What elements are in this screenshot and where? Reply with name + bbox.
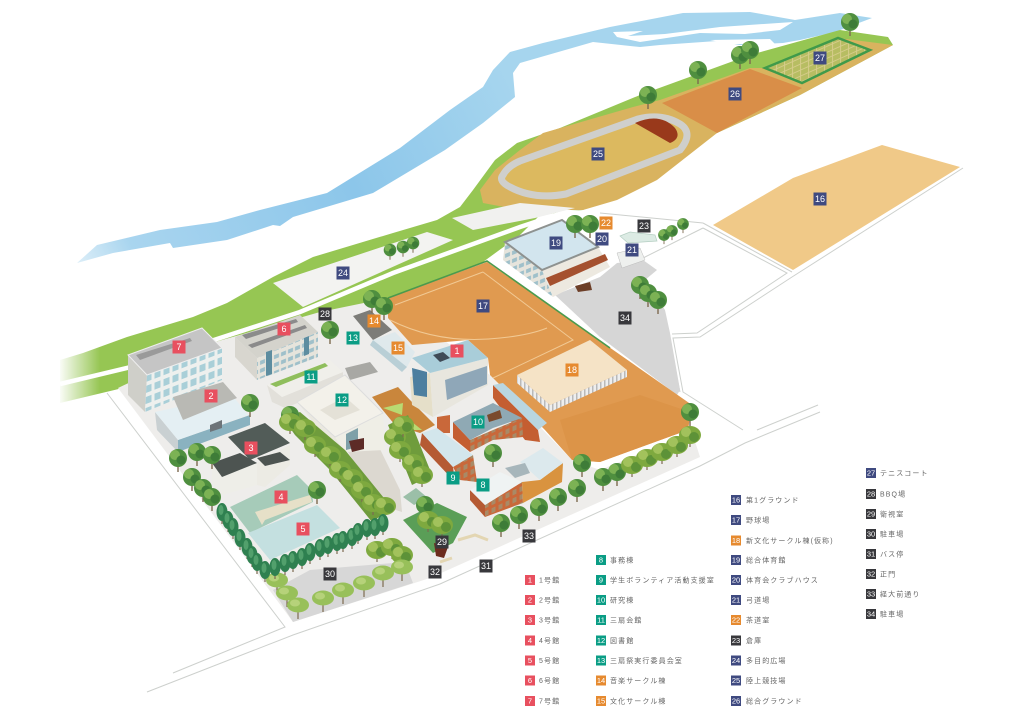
legend column 3: grounds and clubs 16-26: 22 (732, 616, 740, 625)
legend column 3: grounds and clubs 16-26: 18 (732, 536, 740, 545)
legend column 3: grounds and clubs 16-26: 26 (732, 697, 740, 706)
warehouse 23 (620, 232, 657, 243)
marker 27 (814, 52, 826, 64)
legend column 2: facilities 8-15: 11 (597, 616, 605, 625)
marker 18 (566, 364, 578, 376)
front steps (440, 535, 488, 562)
marker 28 (318, 308, 332, 320)
legend column 3: grounds and clubs 16-26: 25 (732, 676, 740, 685)
legend column 1: numbered halls: 5号館 (539, 656, 560, 665)
marker 6 (278, 322, 290, 336)
marker 33: 33 (524, 531, 534, 541)
legend column 2: facilities 8-15: 音楽サークル棟 (610, 676, 666, 685)
legend column 4: outdoor and services 27-34 (866, 468, 929, 619)
white apron near gym (452, 203, 575, 230)
marker 14 (368, 314, 380, 328)
marker 2 (204, 390, 218, 402)
gravel plaza (345, 445, 402, 512)
legend column 2: facilities 8-15: 10 (597, 596, 605, 605)
marker 17 (476, 300, 490, 312)
garden walkway (372, 387, 435, 433)
legend column 3: grounds and clubs 16-26: 陸上競技場 (746, 676, 786, 685)
marker 31: 31 (481, 561, 491, 571)
marker 4: 4 (278, 492, 284, 502)
marker 20 (596, 232, 608, 246)
marker 7: 7 (176, 342, 182, 352)
legend column 3: grounds and clubs 16-26: 体育会クラブハウス (746, 576, 819, 585)
marker 19: 19 (551, 238, 561, 248)
marker 34 (618, 312, 632, 324)
new culture circle building 18 (517, 340, 627, 412)
legend column 2: facilities 8-15: 文化サークル棟 (610, 697, 666, 706)
marker 5 (296, 522, 310, 536)
marker 9: 9 (450, 473, 456, 483)
marker 24: 24 (338, 268, 348, 278)
marker 28: 28 (320, 309, 330, 319)
building 6 (235, 315, 318, 380)
parking lot 30 (273, 562, 413, 622)
marker 1: 1 (454, 346, 460, 356)
legend column 4: outdoor and services 27-34: 経大前通り (880, 590, 920, 599)
legend column 4: outdoor and services 27-34: 正門 (880, 571, 896, 579)
marker 26: 26 (730, 89, 740, 99)
parking lot 34 (555, 260, 680, 395)
legend column 4: outdoor and services 27-34: 29 (867, 510, 875, 519)
tree belt underlay (283, 412, 432, 522)
building 10 (453, 403, 523, 452)
legend column 3: grounds and clubs 16-26: 19 (732, 556, 740, 565)
building 3 (212, 423, 290, 495)
marker 24 (336, 266, 350, 280)
marker 10: 10 (473, 417, 483, 427)
marker 11 (304, 370, 318, 384)
legend column 3: grounds and clubs 16-26: 総合グラウンド (746, 697, 803, 706)
front lawn (403, 503, 467, 553)
marker 9 (446, 472, 460, 484)
marker 3 (244, 442, 258, 454)
long brick building (493, 383, 547, 442)
legend column 1: numbered halls: 5 (528, 656, 532, 665)
building 15 (370, 332, 415, 372)
legend column 3: grounds and clubs 16-26: 17 (732, 516, 740, 525)
legend column 3: grounds and clubs 16-26: 23 (732, 636, 740, 645)
legend column 2: facilities 8-15: 研究棟 (610, 596, 634, 605)
marker 8: 8 (480, 480, 486, 490)
legend column 2: facilities 8-15: 8 (599, 556, 603, 565)
legend column 1: numbered halls: 6 (528, 676, 532, 685)
legend column 4: outdoor and services 27-34: テニスコート (880, 470, 929, 478)
legend column 2: facilities 8-15: 9 (599, 576, 603, 585)
marker 21 (626, 244, 638, 256)
marker 13: 13 (348, 333, 358, 343)
legend column 4: outdoor and services 27-34: 33 (867, 590, 875, 599)
marker 15: 15 (393, 343, 403, 353)
campus pavement (118, 298, 700, 622)
marker 18: 18 (567, 365, 577, 375)
legend column 4: outdoor and services 27-34: 30 (867, 530, 875, 539)
legend column 1: numbered halls: 1号館 (539, 576, 560, 585)
legend column 1: numbered halls: 2 (528, 596, 532, 605)
map number markers (172, 52, 826, 580)
legend column 3: grounds and clubs 16-26: 24 (732, 656, 740, 665)
trees: parking lot row (266, 560, 413, 619)
legend column 2: facilities 8-15: 事務棟 (610, 556, 634, 565)
marker 29 (436, 536, 448, 548)
marker 2: 2 (208, 391, 214, 401)
building 14 (353, 310, 392, 340)
marker 21: 21 (627, 245, 637, 255)
legend column 1: numbered halls: 6号館 (539, 676, 560, 685)
legend column 2: facilities 8-15: 14 (597, 676, 605, 685)
marker 22: 22 (601, 218, 611, 228)
legend column 4: outdoor and services 27-34: 27 (867, 469, 875, 478)
marker 30 (324, 568, 336, 580)
legend column 2: facilities 8-15: 12 (597, 636, 605, 645)
building 7 (128, 328, 222, 412)
legend column 2: facilities 8-15 (596, 555, 715, 706)
general ground 26 (662, 69, 802, 133)
marker 29: 29 (437, 537, 447, 547)
marker 16: 16 (815, 194, 825, 204)
legend column 1: numbered halls: 2号館 (539, 596, 560, 605)
riverside green embankment (60, 30, 893, 403)
building 8 (470, 448, 563, 517)
marker 32 (428, 566, 442, 578)
marker 11: 11 (306, 372, 316, 382)
athletic grounds tan base (480, 38, 893, 210)
marker 12 (336, 394, 348, 406)
legend column 2: facilities 8-15: 13 (597, 656, 605, 665)
marker 23 (638, 220, 650, 232)
legend column 3: grounds and clubs 16-26: 16 (732, 496, 740, 505)
marker 30: 30 (325, 569, 335, 579)
building 1 (410, 340, 488, 417)
marker 7 (172, 340, 186, 354)
legend column 3: grounds and clubs 16-26: 多目的広場 (746, 656, 786, 665)
legend column 1: numbered halls: 7号館 (539, 697, 560, 706)
legend column 4: outdoor and services 27-34: 衛視室 (880, 510, 904, 519)
building 2 (155, 382, 250, 452)
legend column 2: facilities 8-15: 学生ボランティア活動支援室 (610, 576, 715, 585)
marker 5: 5 (300, 524, 306, 534)
legend column 4: outdoor and services 27-34: 34 (867, 610, 875, 619)
legend column 3: grounds and clubs 16-26: 弓道場 (746, 596, 770, 605)
marker 4 (274, 490, 288, 504)
marker 13 (346, 332, 360, 344)
legend column 1: numbered halls: 4 (528, 636, 532, 645)
trees: mature round (169, 13, 859, 537)
legend column 2: facilities 8-15: 15 (597, 697, 605, 706)
marker 12: 12 (337, 395, 347, 405)
legend column 3: grounds and clubs 16-26: 野球場 (746, 516, 770, 525)
legend column 1: numbered halls: 1 (528, 576, 532, 585)
tennis courts 27 (765, 38, 870, 83)
trees: yellow-green grove (279, 413, 701, 567)
marker 15 (392, 342, 404, 354)
legend column 4: outdoor and services 27-34: 駐車場 (880, 530, 904, 539)
marker 17: 17 (478, 301, 488, 311)
legend column 3: grounds and clubs 16-26: 倉庫 (746, 636, 762, 645)
river (77, 12, 872, 263)
marker 22 (600, 216, 612, 230)
marker 10 (472, 416, 484, 428)
multipurpose field 24 (273, 232, 453, 307)
legend column 4: outdoor and services 27-34: 32 (867, 570, 875, 579)
marker 23: 23 (639, 221, 649, 231)
marker 16 (814, 192, 826, 206)
legend column 3: grounds and clubs 16-26: 新文化サークル棟(仮称) (746, 536, 834, 545)
legend column 2: facilities 8-15: 三扇会館 (610, 616, 642, 625)
marker 20: 20 (597, 234, 607, 244)
building 9 (420, 415, 477, 482)
legend column 4: outdoor and services 27-34: バス停 (880, 550, 904, 559)
marker 27: 27 (815, 53, 825, 63)
gatehouse 29 (434, 543, 448, 558)
baseball field 17 (388, 261, 692, 462)
legend column 4: outdoor and services 27-34: BBQ場 (880, 490, 906, 499)
track and field 25 (502, 117, 687, 196)
legend column 3: grounds and clubs 16-26: 第1グラウンド (746, 496, 800, 505)
marker 14: 14 (369, 316, 379, 326)
marker 6: 6 (281, 324, 287, 334)
legend column 1: numbered halls: 4号館 (539, 636, 560, 645)
legend column 4: outdoor and services 27-34: 駐車場 (880, 610, 904, 619)
legend column 1: numbered halls: 3号館 (539, 616, 560, 625)
legend column 3: grounds and clubs 16-26: 20 (732, 576, 740, 585)
building 12 (297, 375, 385, 452)
gymnasium 19 (503, 220, 610, 297)
embankment left fade (58, 345, 100, 407)
legend column 1: numbered halls: 7 (528, 697, 532, 706)
small pond (403, 488, 428, 505)
marker 32: 32 (430, 567, 440, 577)
marker 33 (522, 530, 536, 542)
archery hall 21 (617, 248, 645, 268)
legend column 3: grounds and clubs 16-26: 21 (732, 596, 740, 605)
legend column 1: numbered halls: 3 (528, 616, 532, 625)
legend column 3: grounds and clubs 16-26 (731, 495, 834, 706)
marker 8 (476, 478, 490, 492)
marker 3: 3 (248, 443, 254, 453)
marker 25 (592, 148, 604, 160)
legend column 3: grounds and clubs 16-26: 総合体育館 (746, 556, 786, 565)
marker 26 (728, 88, 742, 100)
marker 1 (450, 344, 464, 358)
embankment road (60, 212, 703, 384)
building 5 (248, 505, 340, 560)
legend column 4: outdoor and services 27-34: 28 (867, 490, 875, 499)
building 11 (267, 360, 378, 408)
first ground 16 (713, 145, 960, 270)
legend column 1: numbered halls (525, 575, 560, 706)
trees: small groups (384, 218, 689, 260)
legend column 2: facilities 8-15: 図書館 (610, 636, 634, 645)
marker 19 (550, 236, 562, 250)
legend column 4: outdoor and services 27-34: 31 (867, 550, 875, 559)
marker 25: 25 (593, 149, 603, 159)
marker 34: 34 (620, 313, 630, 323)
legend column 2: facilities 8-15: 三扇祭実行委員会室 (610, 656, 683, 665)
building 4 (230, 475, 313, 533)
trees: conifer rows (216, 503, 388, 582)
road outlines (107, 168, 963, 692)
legend column 3: grounds and clubs 16-26: 茶道室 (746, 616, 770, 625)
marker 31 (480, 560, 492, 572)
